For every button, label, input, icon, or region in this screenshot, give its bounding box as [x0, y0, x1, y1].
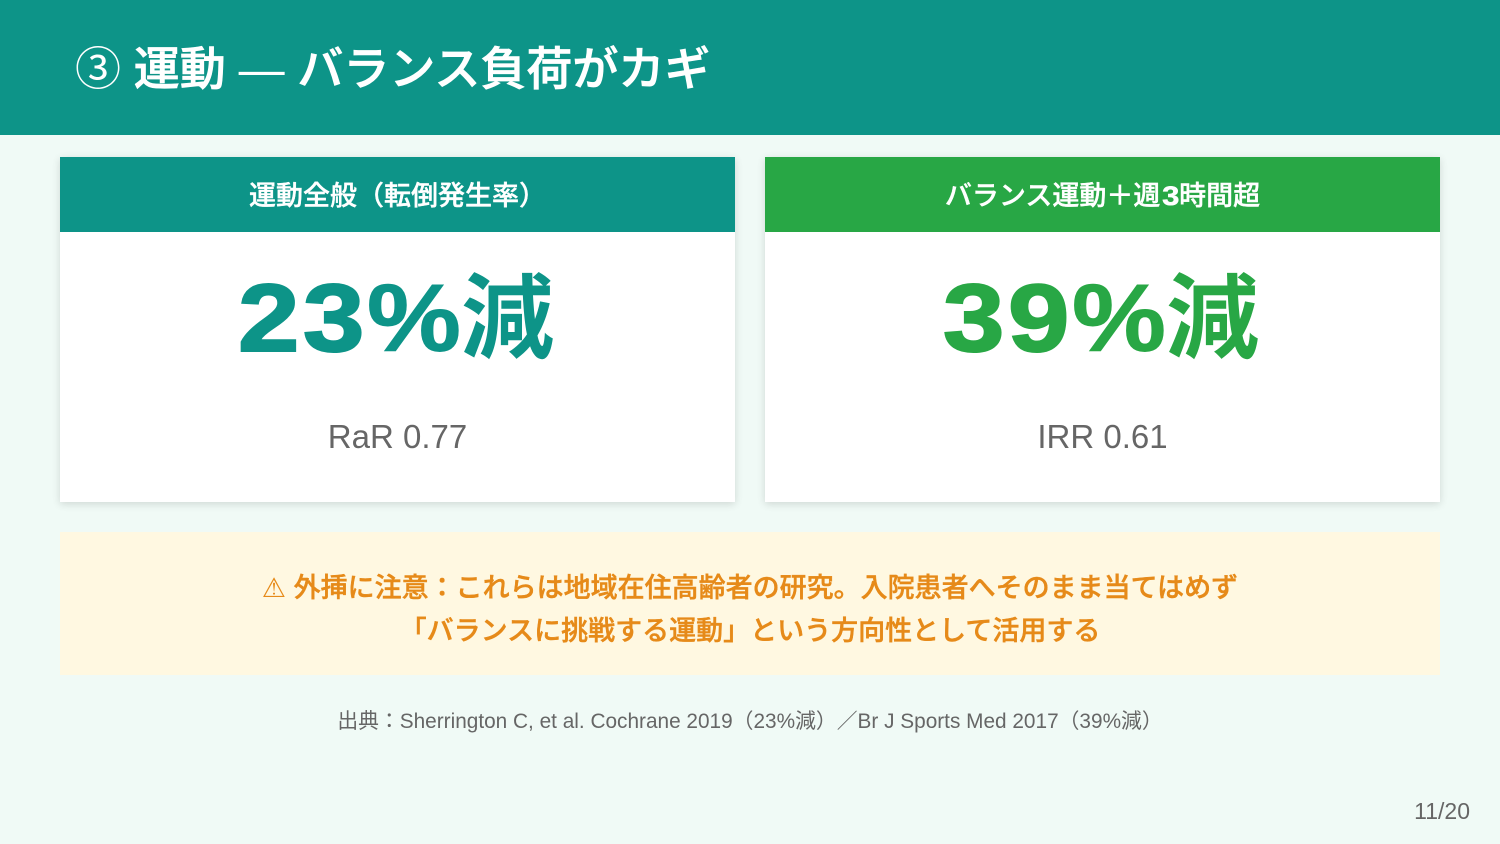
panel: general exercise	[60, 157, 735, 502]
header band	[0, 0, 1500, 135]
callout: extrapolation warning: 「バランスに挑戦する運動」という方向性として活用する	[400, 616, 1100, 646]
source citation: 出典：Sherrington C, et al. Cochrane 2019（23%減）／Br J Sports Med 2017（39%減）	[337, 710, 1163, 733]
page number: 11/20	[1414, 798, 1470, 824]
callout: extrapolation warning	[60, 532, 1440, 675]
big stat: 23% reduction: 3	[302, 265, 364, 372]
big stat: 39% reduction: 9	[1008, 265, 1069, 372]
title: ③ 運動 — バランス負荷がカギ	[75, 43, 710, 95]
big stat: 23% reduction: %	[367, 265, 461, 372]
panel heading: general exercise	[60, 157, 735, 232]
big stat: 23% reduction: 減	[461, 267, 554, 371]
panel heading: general exercise: 運動全般（転倒発生率）	[249, 181, 546, 211]
big stat: 39% reduction: 減	[1166, 267, 1259, 371]
panel heading: balance exercise: バランス運動＋週 時間超	[945, 181, 1260, 211]
big stat: 39% reduction: %	[1072, 265, 1166, 372]
rate ratio value: RaR 0.77	[328, 418, 467, 455]
big stat: 23% reduction	[238, 265, 554, 372]
big stat: 39% reduction: 3	[943, 265, 1004, 372]
panel: balance exercise	[765, 157, 1440, 502]
callout: extrapolation warning: ⚠ 外挿に注意：これらは地域在住高齢者の研究。入院患者へそのまま当てはめず	[262, 573, 1238, 604]
panel heading: balance exercise	[765, 157, 1440, 232]
big stat: 39% reduction	[943, 265, 1259, 372]
big stat: 23% reduction: 2	[238, 265, 299, 372]
incidence rate ratio value: IRR 0.61	[1037, 418, 1168, 455]
panel heading: balance exercise: 3	[1162, 181, 1180, 211]
